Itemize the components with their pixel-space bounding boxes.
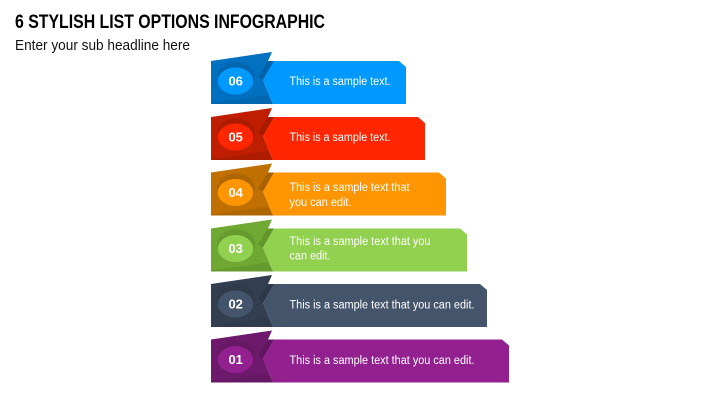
text 04: This is a sample text that [290, 182, 410, 194]
badge 05: 05 [228, 130, 243, 144]
badge 04: 04 [228, 185, 244, 200]
text 05: This is a sample text. [290, 132, 390, 144]
row 02 [211, 275, 487, 327]
badge 03: 03 [228, 241, 243, 256]
row 05 [211, 108, 425, 160]
text 01: This is a sample text that you can edit. [290, 355, 474, 367]
badge 05 [217, 118, 255, 150]
ribbon 02 [211, 275, 274, 327]
text 04: you can edit. [290, 197, 352, 209]
row 06 [211, 52, 406, 104]
badge 02 [217, 285, 255, 318]
text 03 [290, 236, 430, 262]
ribbon 06 [211, 52, 274, 104]
ribbon 01 [211, 330, 274, 382]
badge 06: 06 [228, 74, 243, 88]
text 03: can edit. [290, 250, 330, 262]
row 03 [211, 220, 467, 272]
row 01 [211, 330, 509, 382]
subtitle: Enter your sub headline here [15, 38, 190, 54]
ribbon 03 [211, 220, 274, 272]
bar 05 [263, 117, 425, 160]
title: 6 STYLISH LIST OPTIONS INFOGRAPHIC [15, 12, 325, 33]
bar 02 [263, 284, 487, 327]
bar 03 [263, 228, 467, 272]
badge 02: 02 [228, 296, 243, 312]
badge 06 [217, 62, 255, 94]
text 03: This is a sample text that you [290, 236, 430, 248]
text 04 [290, 182, 410, 209]
bar 01 [263, 340, 509, 382]
badge 01: 01 [228, 352, 243, 367]
text 02: This is a sample text that you can edit. [290, 300, 474, 312]
text 06: This is a sample text. [290, 76, 390, 88]
ribbon 04 [211, 164, 274, 216]
badge 01 [217, 340, 255, 373]
badge 04 [217, 174, 255, 206]
bar 06 [263, 61, 406, 104]
badge 03 [217, 230, 255, 262]
ribbon 05 [211, 108, 274, 160]
row 04 [211, 164, 446, 216]
bar 04 [263, 172, 446, 216]
